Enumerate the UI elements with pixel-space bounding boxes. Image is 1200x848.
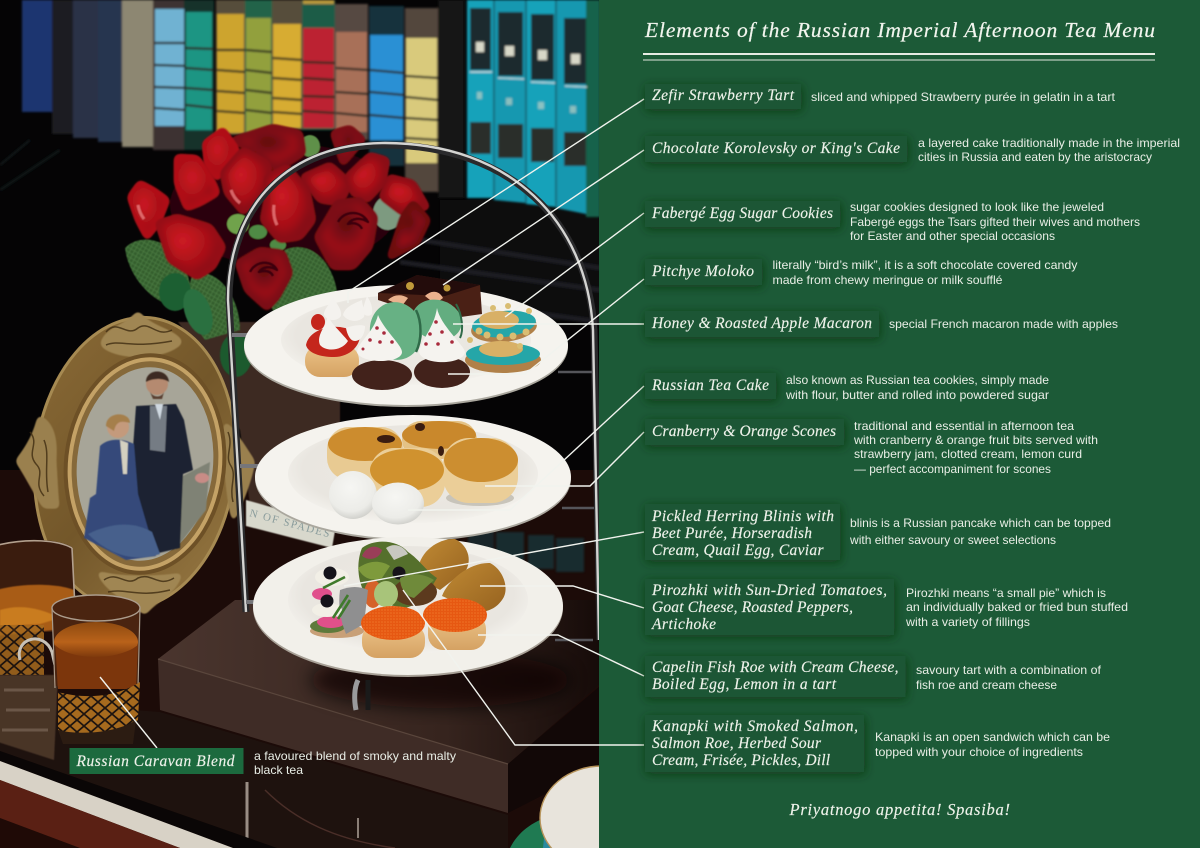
menu item: Russian Caravan Blend: a favoured blend of smoky and malty: [254, 749, 456, 763]
tea glasses: [0, 540, 140, 760]
menu item: Cranberry and Orange Scones: — perfect accompaniment for scones: [854, 462, 1051, 476]
right glass: [52, 595, 140, 744]
menu item: Pitchye Moloko: made from chewy meringue or milk soufflé: [772, 273, 1003, 287]
bookshelf: [22, 0, 600, 217]
greenery: [125, 135, 403, 377]
teacup: [510, 766, 664, 848]
menu item: Pitchye Moloko: [645, 258, 1078, 287]
menu item: Russian Tea Cake: [645, 373, 1049, 402]
roe tarts: [361, 598, 487, 658]
menu item: Cranberry and Orange Scones: with cranberry & orange fruit bits served with: [853, 433, 1098, 447]
menu item: Cranberry and Orange Scones: [645, 419, 1098, 476]
menu item: Kanapki: topped with your choice of ingredients: [875, 745, 1083, 759]
food: scones and tea cakes: [327, 421, 518, 524]
menu item: Pirozhki: Pirozhki with Sun-Dried Tomatoes,: [651, 582, 887, 599]
menu item: Zefir Strawberry Tart: sliced and whipped Strawberry purée in gelatin in a tart: [811, 90, 1116, 104]
menu item: Capelin Fish Roe: savoury tart with a combination of: [916, 663, 1102, 677]
book: Queen of Spades: [246, 500, 336, 548]
menu item: Zefir Strawberry Tart: Zefir Strawberry Tart: [652, 87, 795, 104]
title: Elements of the Russian Imperial Afternoon Tea Menu: [644, 18, 1155, 42]
menu item: Pickled Herring Blinis: with either savoury or sweet selections: [849, 533, 1056, 547]
menu item: Pickled Herring Blinis: Pickled Herring Blinis with: [651, 508, 834, 525]
menu item: Capelin Fish Roe: Boiled Egg, Lemon in a tart: [652, 676, 837, 693]
plate: bottom tier: [253, 537, 563, 677]
menu item: Russian Tea Cake: with flour, butter and rolled into powdered sugar: [785, 388, 1049, 402]
menu item: Cranberry and Orange Scones: traditional and essential in afternoon tea: [854, 419, 1074, 433]
menu item: Russian Tea Cake: also known as Russian tea cookies, simply made: [786, 373, 1049, 387]
photo: afternoon tea table setting: [0, 0, 664, 848]
metal tiered stand: [228, 143, 600, 710]
menu item: Cranberry and Orange Scones: Cranberry & Orange Scones: [652, 423, 836, 440]
menu item: Kanapki: Cream, Frisée, Pickles, Dill: [652, 752, 830, 769]
food: blinis, kanapki, pirozhki, roe tarts: [310, 539, 506, 658]
menu item: Fabergé Egg Sugar Cookies: [645, 200, 1140, 243]
menu item: Zefir Strawberry Tart: [645, 84, 1116, 109]
ornaments: [15, 310, 255, 616]
menu item: Pickled Herring Blinis: Beet Purée, Horseradish: [652, 525, 812, 542]
menu item: Capelin Fish Roe: Capelin Fish Roe with Cream Cheese,: [652, 659, 898, 676]
left glass: [0, 540, 76, 760]
menu item: Cranberry and Orange Scones: strawberry jam, clotted cream, lemon curd: [854, 447, 1082, 461]
book: Queen of Spades: N OF SPADES: [248, 507, 332, 541]
menu item: Russian Caravan Blend: black tea: [254, 763, 303, 777]
menu item: Pitchye Moloko: literally “bird’s milk”, it is a soft chocolate covered candy: [772, 258, 1078, 272]
menu item: Honey and Roasted Apple Macaron: Honey & Roasted Apple Macaron: [651, 315, 872, 332]
sugar cookies: [465, 303, 541, 373]
panel: menu background: [599, 0, 1200, 848]
menu item: Kanapki: Kanapki with Smoked Salmon,: [651, 718, 858, 735]
menu item: Fabergé Egg Sugar Cookies: Fabergé Egg Sugar Cookies: [651, 205, 833, 222]
menu item: Honey and Roasted Apple Macaron: [645, 311, 1118, 337]
macarons: [365, 294, 466, 365]
menu item: Russian Caravan Blend: Russian Caravan Blend: [76, 753, 235, 770]
menu item: Pirozhki: an individually baked or fried bun stuffed: [906, 600, 1128, 614]
menu item: Fabergé Egg Sugar Cookies: for Easter and other special occasions: [850, 229, 1055, 243]
menu item: Honey and Roasted Apple Macaron: special French macaron made with apples: [889, 317, 1118, 331]
menu item: Pirozhki: with a variety of fillings: [905, 615, 1030, 629]
food: pitchye, macaron, zefir, cake, cookies: [305, 275, 541, 390]
portrait: couple: [84, 372, 210, 560]
table surface: [0, 470, 600, 848]
kanapki salad: [358, 542, 437, 608]
menu item: Pirozhki: Artichoke: [651, 616, 716, 633]
menu item: Pickled Herring Blinis: blinis is a Russian pancake which can be topped: [850, 516, 1111, 530]
leader lines: [100, 99, 644, 748]
menu item: Chocolate Korolevsky: Chocolate Korolevsky or King's Cake: [652, 140, 900, 157]
tray edge: [0, 751, 277, 848]
tray reflections: [0, 700, 508, 848]
pitchye moloko: [352, 308, 470, 390]
menu item: Kanapki: Salmon Roe, Herbed Sour: [652, 735, 822, 752]
menu item: Kanapki: Kanapki is an open sandwich which can be: [875, 730, 1110, 744]
menu item: Russian Tea Cake: Russian Tea Cake: [651, 377, 769, 394]
menu item: Russian Caravan Blend: [70, 748, 456, 777]
zefir strawberry tart: [305, 296, 372, 377]
brown box behind stand: [178, 322, 340, 505]
closing message: Priyatnogo appetita! Spasiba!: [788, 800, 1010, 819]
chocolate king's cake: [378, 275, 482, 320]
menu item: Fabergé Egg Sugar Cookies: sugar cookies designed to look like the jeweled: [850, 200, 1104, 214]
shelf shadows: [0, 140, 600, 322]
stand base box: [158, 600, 600, 813]
menu item: Pirozhki: [645, 579, 1128, 635]
pirozhki: [418, 539, 506, 612]
menu item: Pickled Herring Blinis: Cream, Quail Egg, Caviar: [652, 542, 824, 559]
background books reflection: [468, 530, 584, 572]
menu item: Capelin Fish Roe: [645, 656, 1102, 697]
roses: [130, 127, 428, 308]
photo frame with portrait: [15, 307, 255, 619]
icon: bouquet of red roses: [125, 127, 428, 377]
menu item: Chocolate Korolevsky: a layered cake traditionally made in the imperial: [918, 136, 1180, 150]
menu item: Pirozhki: Pirozhki means “a small pie” which is: [906, 586, 1106, 600]
plate: top tier: [244, 285, 568, 407]
menu item: Pirozhki: Goat Cheese, Roasted Peppers,: [652, 599, 853, 616]
menu item: Capelin Fish Roe: fish roe and cream cheese: [916, 678, 1057, 692]
menu item: Pickled Herring Blinis: [645, 504, 1111, 560]
menu item: Pitchye Moloko: Pitchye Moloko: [651, 263, 754, 280]
menu item: Kanapki: [645, 715, 1110, 772]
scones: [327, 421, 518, 507]
menu item: Fabergé Egg Sugar Cookies: Fabergé eggs the Tsars gifted their wives and mothers: [850, 215, 1140, 229]
menu item: Chocolate Korolevsky: [645, 136, 1180, 164]
pickled herring blinis: [310, 566, 368, 638]
plate: middle tier: [255, 415, 571, 541]
menu item: Chocolate Korolevsky: cities in Russia and eaten by the aristocracy: [918, 150, 1152, 164]
